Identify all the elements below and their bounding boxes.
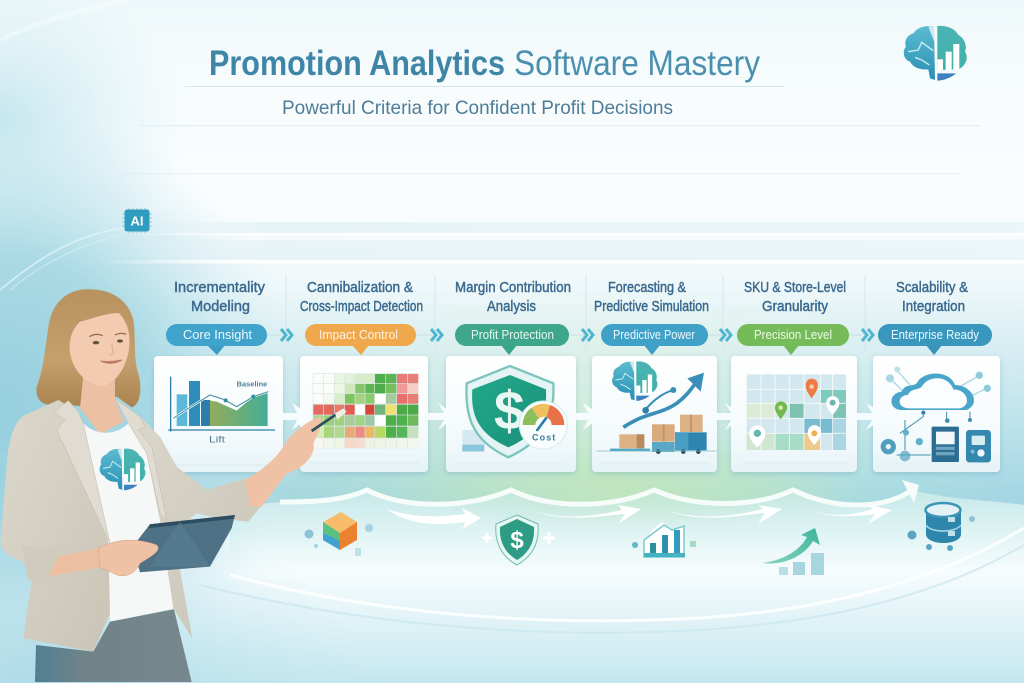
neck: [80, 375, 124, 434]
pill: Profit Protection: [455, 324, 569, 355]
icon: colored cube: [304, 512, 373, 556]
column 2 heading: Cannibalization &: [307, 280, 413, 296]
panel: SKU granularity card: [731, 356, 857, 472]
arrow: long wave flow ribbon: [280, 480, 919, 505]
icon: AI chip: AI: [130, 214, 144, 228]
column 2 heading: Cross-Impact Detection: [300, 299, 423, 315]
pill: Precision Level: [737, 324, 849, 355]
pill: Core Insight: Core Insight: [183, 328, 253, 342]
pill: Enterprise Ready: [878, 324, 992, 355]
arrows: chevrons between pills: [267, 329, 873, 341]
column 4 heading: Predictive Simulation: [594, 299, 709, 315]
pill: Impact Control: Impact Control: [319, 328, 398, 342]
panel: scalability card: [873, 356, 1000, 472]
column 5 heading: [744, 280, 846, 315]
icon: AI chip: [122, 208, 152, 233]
t-shirt: [83, 423, 175, 622]
right forearm and hand: [245, 417, 322, 507]
column 3 heading: Analysis: [487, 299, 536, 315]
pants: [35, 609, 192, 682]
left forearm: [48, 548, 107, 576]
icon: forecasting brain, growth arrow and cargo: [597, 361, 717, 454]
chart: baseline and lift: [168, 377, 275, 444]
hair: [36, 289, 140, 407]
title: Promotion Analytics: [209, 44, 505, 83]
icon: dollar shield with cost gauge: Cost: [532, 433, 555, 443]
pill: Predictive Power: [601, 324, 708, 355]
icon: database cylinder: [908, 503, 975, 551]
presenter: woman with tablet: [1, 289, 347, 682]
column 1 heading: Modeling: [191, 299, 250, 315]
arrow: card flow arrows: [283, 403, 887, 430]
column 6 heading: [896, 280, 968, 315]
column 3 heading: [455, 280, 571, 315]
column 5 heading: SKU & Store-Level: [744, 280, 846, 296]
panel: forecasting card: [592, 356, 717, 472]
pill: Precision Level: Precision Level: [754, 328, 832, 342]
icon: dollar shield with cost gauge: [462, 366, 567, 457]
title: [209, 44, 760, 83]
tablet: [133, 515, 235, 572]
pill: Profit Protection: Profit Protection: [471, 328, 554, 342]
column 4 heading: Forecasting &: [608, 280, 686, 296]
column 5 heading: Granularity: [762, 299, 829, 315]
panel: cannibalization heatmap card: [300, 356, 428, 472]
arrows: small flow arrows: [387, 505, 892, 529]
pill: Enterprise Ready: Enterprise Ready: [891, 328, 980, 342]
icon: cloud network and devices: [881, 366, 991, 462]
pill: Impact Control: [305, 324, 416, 355]
pill: Predictive Power: Predictive Power: [613, 328, 695, 342]
icon: dollar shield with cost gauge: $: [494, 379, 525, 441]
chart: baseline and lift: Lift: [209, 434, 225, 444]
chart: baseline and lift: Baseline: [237, 379, 267, 388]
lapels: [54, 401, 110, 543]
subtitle: Powerful Criteria for Confident Profit Decisions: [282, 98, 673, 119]
column 2 heading: [300, 280, 423, 315]
shirt logo: [100, 449, 145, 490]
jacket left side: [1, 400, 110, 652]
jacket right side: [115, 398, 261, 638]
left cuff: [22, 547, 63, 587]
panel: incrementality chart card: [154, 356, 283, 472]
column 4 heading: [594, 280, 709, 315]
icon: small bar chart house: [632, 522, 696, 557]
chart: heatmap: [313, 373, 418, 448]
title: Software Mastery: [514, 44, 760, 83]
icon: small dollar shield: $: [510, 527, 524, 554]
pill: Core Insight: [166, 324, 267, 355]
icon: brain logo: [904, 26, 967, 81]
column 1 heading: Incrementality: [174, 280, 266, 296]
left hand: [98, 540, 158, 576]
column 1 heading: [174, 280, 266, 315]
icon: small dollar shield: [482, 515, 555, 565]
icon: growth arrow with bars: [762, 528, 824, 575]
facial features: [89, 333, 126, 363]
column 6 heading: Scalability &: [896, 280, 968, 296]
chart: store map grid with pins: [747, 374, 846, 450]
pen: [312, 414, 337, 431]
column 3 heading: Margin Contribution: [455, 280, 571, 296]
column 6 heading: Integration: [902, 299, 965, 315]
panel: margin contribution card: [446, 356, 576, 472]
face: [70, 313, 130, 386]
